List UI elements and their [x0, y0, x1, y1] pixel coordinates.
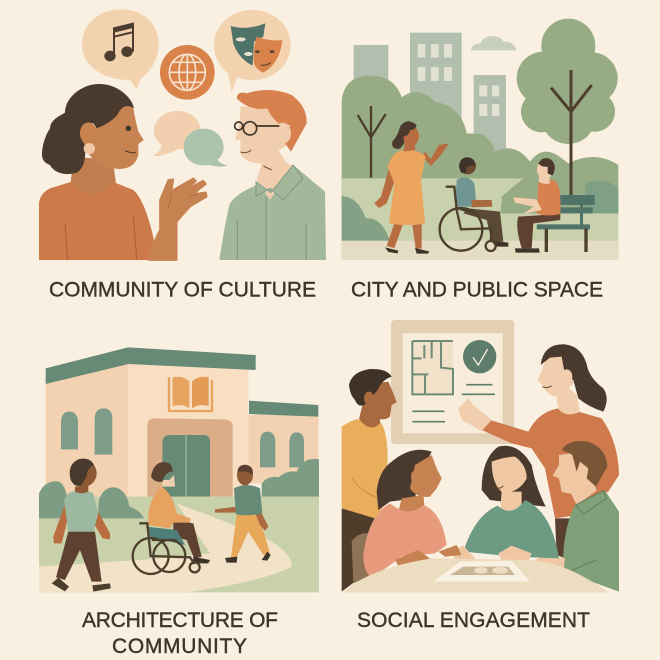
poster with floor plan [391, 320, 514, 444]
illustration: group meeting [342, 320, 619, 592]
large tree [517, 19, 618, 195]
heading line two: COMMUNITY [112, 635, 247, 658]
panel: architecture of community [39, 347, 319, 658]
person: woman talking [39, 84, 207, 260]
person: seated man [513, 158, 561, 253]
illustration: two people talking [39, 9, 326, 260]
person: wheelchair user [133, 462, 210, 574]
cloud [471, 36, 517, 50]
table with plan [343, 558, 608, 592]
heading: social engagement: SOCIAL ENGAGEMENT [357, 609, 590, 632]
heading: architecture of community: ARCHITECTURE OF [82, 609, 278, 632]
heading: community of culture: COMMUNITY OF CULTURE [49, 278, 316, 302]
heading: city and public space: CITY AND PUBLIC SPACE [351, 278, 603, 302]
icon: small speech bubbles [153, 111, 228, 167]
person: woman in pink sweater [352, 450, 462, 583]
illustration: park scene [342, 19, 618, 260]
person: child walking [215, 465, 271, 563]
bushes [39, 459, 319, 518]
building walls [46, 364, 318, 500]
bench [537, 195, 595, 252]
person: woman presenting [458, 344, 619, 558]
panel: community of culture [39, 9, 326, 301]
lawn [39, 497, 319, 592]
bushes and lawn [342, 76, 618, 260]
panel: city and public space [342, 19, 618, 302]
person: seated man in green shirt [532, 441, 619, 592]
panel: social engagement [342, 320, 619, 632]
icon: globe [160, 45, 215, 100]
windows [61, 408, 304, 467]
small tree [358, 106, 386, 178]
city buildings [354, 33, 506, 157]
person: woman in teal sweater [451, 446, 559, 562]
icon: theatre masks bubble [214, 10, 291, 93]
roof [46, 347, 318, 417]
illustration: community building [39, 347, 319, 592]
entrance door [147, 418, 233, 497]
footpath [39, 503, 292, 592]
person: man with glasses [219, 90, 326, 260]
person: walker in green shirt [52, 459, 111, 592]
person: man in yellow shirt [342, 369, 397, 592]
person: wheelchair user [440, 157, 508, 251]
person: woman in orange dress [374, 121, 449, 254]
icon: open book [169, 377, 212, 411]
icon: music note bubble [82, 9, 159, 89]
